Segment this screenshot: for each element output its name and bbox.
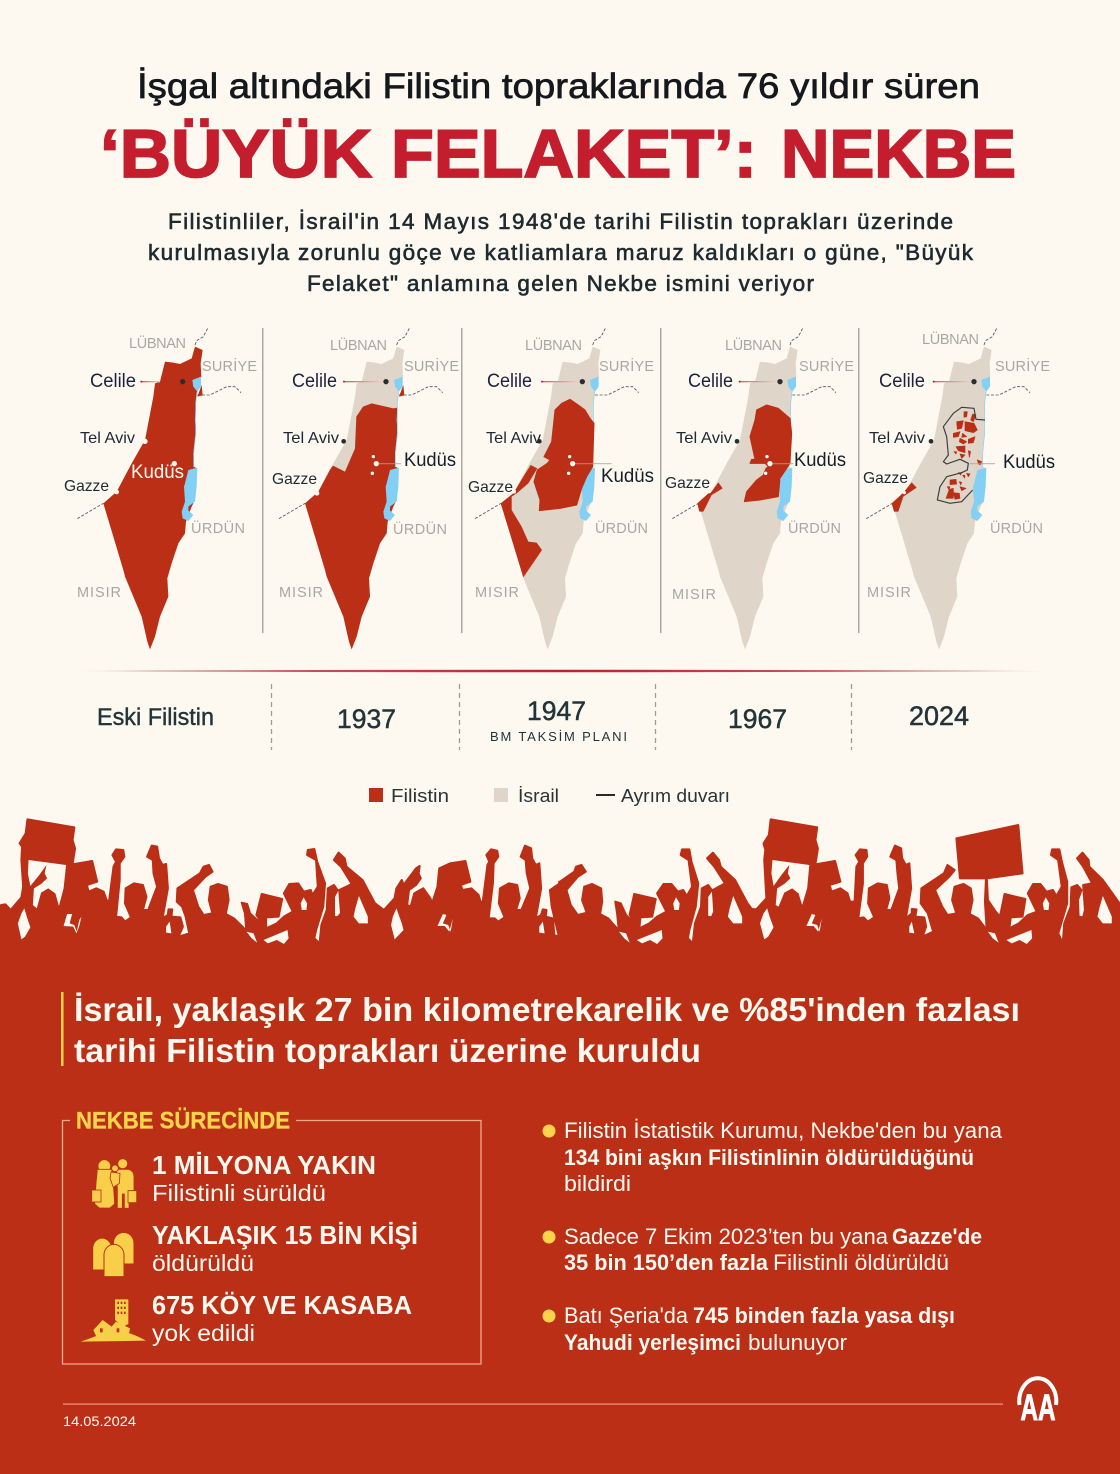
bullet 3: Yahudi yerleşimci: [564, 1330, 741, 1355]
bullet 3: 745 binden fazla yasa dışı: [693, 1303, 955, 1328]
map: Eski Filistin: MISIR: [77, 585, 121, 601]
main heading: NEKBE: [781, 116, 1016, 192]
map: 1947: Celile: [487, 371, 532, 392]
map: 1967: Kudüs: [794, 450, 846, 471]
map: 1937: SURİYE: [404, 357, 459, 375]
map: 1947: LÜBNAN: [525, 336, 582, 354]
map: 1947: SURİYE: [599, 357, 654, 375]
timeline labels: BM TAKSİM PLANI: [490, 729, 627, 744]
stat: yaklaşık 15 bin kişi: YAKLAŞIK 15 BİN KİŞİ: [152, 1220, 418, 1250]
map: 2024: Kudüs: [1003, 452, 1055, 473]
map: 1937: MISIR: [279, 585, 323, 601]
legend: İsrail: [518, 786, 559, 806]
stat: 1 milyona yakın: [152, 1150, 376, 1206]
map: 1967: LÜBNAN: [725, 336, 782, 354]
intro paragraph: [148, 209, 974, 296]
map: Eski Filistin: Tel Aviv: [80, 430, 135, 447]
map: 1937: Kudüs: [404, 450, 456, 471]
logo: AA: AA: [1020, 1387, 1056, 1428]
map: 1937: Tel Aviv: [283, 430, 339, 447]
headline: tarihi Filistin toprakları üzerine kuruldu: [74, 1032, 701, 1069]
map: 1937: Celile: [292, 371, 337, 392]
map: 1937: ÜRDÜN: [393, 520, 447, 538]
divider: [262, 328, 264, 633]
timeline labels: 1937: [337, 704, 396, 734]
map: 1967: MISIR: [672, 587, 716, 603]
legend: Filistin: [391, 786, 449, 806]
map: Eski Filistin: Gazze: [64, 478, 109, 495]
intro paragraph: Filistinliler, İsrail'in 14 Mayıs 1948'de tarihi Filistin toprakları üzerinde: [168, 209, 953, 234]
divider: [660, 328, 662, 633]
map: Eski Filistin: LÜBNAN: [129, 334, 186, 352]
bullet 3: Batı Şeria'da: [564, 1303, 689, 1328]
stat: 1 milyona yakın: 1 MİLYONA YAKIN: [152, 1150, 376, 1180]
bullet 1: 134 bini aşkın Filistinlinin öldürüldüğünü: [564, 1145, 974, 1170]
headline accent bar: [61, 992, 64, 1066]
bullet 1: Filistin İstatistik Kurumu, Nekbe'den bu yana: [564, 1118, 1003, 1143]
divider: [461, 328, 462, 633]
main heading: ‘BÜYÜK: [100, 116, 372, 192]
icon: displaced family: [92, 1159, 137, 1208]
bullet 2: Gazze'de: [892, 1224, 982, 1249]
map: 2024: ÜRDÜN: [990, 519, 1043, 537]
map: 1947: [468, 328, 654, 649]
map: Eski Filistin: ÜRDÜN: [191, 519, 245, 537]
timeline labels: Eski Filistin: [97, 704, 214, 731]
legend: Ayrım duvarı: [621, 786, 730, 806]
panel: Nekbe sürecinde: [62, 1108, 481, 1364]
map: 1967: Celile: [688, 371, 733, 392]
map: 2024: Celile: [879, 371, 925, 392]
map: Eski Filistin: Kudüs: [131, 462, 184, 483]
map: 1937: [272, 328, 459, 653]
bullet 1: bildirdi: [564, 1171, 631, 1196]
map: 1947: ÜRDÜN: [595, 519, 648, 537]
map: 1947: Gazze: [468, 479, 513, 496]
bullet 2: 35 bin 150’den fazla: [564, 1250, 769, 1275]
map: 1967: ÜRDÜN: [788, 519, 841, 537]
icon: tombstones: [93, 1232, 134, 1277]
bullet 1: [542, 1118, 1003, 1196]
logo: AA: [1019, 1378, 1056, 1428]
map: 2024: MISIR: [867, 585, 911, 601]
map: 1937: LÜBNAN: [330, 336, 387, 354]
map: Eski Filistin: Celile: [90, 371, 136, 392]
protest crowd silhouette: [0, 819, 1120, 1474]
headline: İsrail, yaklaşık 27 bin kilometrekarelik ve %85'inden fazlası: [74, 991, 1020, 1028]
map: 1947: Tel Aviv: [486, 430, 541, 447]
main heading: FELAKET’:: [391, 116, 757, 192]
map: Eski Filistin: [64, 328, 257, 649]
intro paragraph: kurulmasıyla zorunlu göçe ve katliamlara maruz kaldıkları o güne, "Büyük: [148, 240, 974, 265]
timeline labels: 2024: [909, 701, 969, 731]
stat: 675 köy ve kasaba: [152, 1290, 412, 1346]
divider: [858, 328, 860, 633]
map: 1947: MISIR: [475, 585, 519, 601]
stat: 1 milyona yakın: Filistinli sürüldü: [152, 1180, 326, 1206]
map: 2024: Gazze: [863, 470, 908, 487]
map: 1967: Gazze: [665, 475, 710, 492]
stat: 675 köy ve kasaba: yok edildi: [152, 1320, 255, 1346]
bullet 2: Sadece 7 Ekim 2023’ten bu yana: [564, 1224, 889, 1249]
map: 1937: Gazze: [272, 471, 317, 488]
map: 1947: Kudüs: [601, 466, 654, 487]
map: 2024: LÜBNAN: [922, 330, 979, 348]
timeline labels: 1947: [527, 696, 586, 726]
bullet 2: Filistinli öldürüldü: [773, 1250, 949, 1275]
icon: destroyed buildings: [81, 1299, 146, 1342]
headline: [74, 991, 1020, 1069]
bullet list: [542, 1118, 1003, 1355]
bullet 2: [542, 1224, 982, 1275]
map: 2024: SURİYE: [995, 357, 1050, 375]
stat: yaklaşık 15 bin kişi: öldürüldü: [152, 1250, 254, 1276]
map: 2024: Tel Aviv: [869, 430, 925, 447]
bullet 3: [542, 1303, 955, 1355]
stat: 675 köy ve kasaba: 675 KÖY VE KASABA: [152, 1290, 412, 1320]
map: 1967: SURİYE: [799, 357, 854, 375]
map: Eski Filistin: SURİYE: [202, 357, 257, 375]
title line: İşgal altındaki Filistin topraklarında 76 yıldır süren: [137, 67, 980, 106]
map: 1967: [665, 328, 854, 649]
panel heading: NEKBE SÜRECİNDE: [76, 1108, 290, 1134]
stat: yaklaşık 15 bin kişi: [152, 1220, 418, 1276]
bullet 3: bulunuyor: [748, 1330, 847, 1355]
map: 1967: Tel Aviv: [676, 430, 732, 447]
timeline labels: 1967: [728, 704, 787, 734]
timeline labels: [97, 696, 969, 744]
legend: [369, 786, 730, 806]
map: 2024: [863, 328, 1055, 649]
intro paragraph: Felaket" anlamına gelen Nekbe ismini veriyor: [307, 271, 814, 296]
date: 14.05.2024: [63, 1414, 137, 1429]
main heading: [100, 116, 1016, 192]
timeline rule: [78, 670, 1045, 672]
